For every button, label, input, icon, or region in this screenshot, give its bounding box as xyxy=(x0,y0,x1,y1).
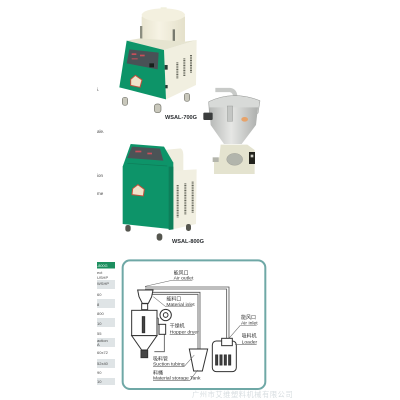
machine: WSAL-800G loader xyxy=(123,144,197,241)
table alternating rows xyxy=(97,280,115,385)
table text: 60 xyxy=(97,292,102,297)
table header xyxy=(97,262,115,268)
hopper cylinder xyxy=(140,7,185,46)
black switch box xyxy=(249,152,255,164)
casters xyxy=(122,93,190,113)
system diagram panel xyxy=(123,260,265,389)
vent slots xyxy=(177,55,191,78)
green front xyxy=(123,144,173,229)
table text: A xyxy=(97,342,100,347)
diagram: labels: 吸料管 xyxy=(153,355,168,362)
diagram: labels: Suction tubing xyxy=(153,362,185,368)
table text: 90 xyxy=(97,370,102,375)
body xyxy=(209,107,258,144)
table text: 8 xyxy=(97,302,100,307)
label: WSAL-800G: WSAL-800G xyxy=(172,239,204,245)
base block xyxy=(214,145,255,174)
steel bowl lid xyxy=(209,96,260,113)
casters xyxy=(125,224,191,241)
curved suction pipe xyxy=(215,90,235,98)
rounded frame xyxy=(123,260,265,389)
table text: USHP xyxy=(97,275,108,280)
table text: 55 xyxy=(97,331,102,336)
table text xyxy=(97,264,109,384)
diagram: labels: 能风口 xyxy=(174,269,189,276)
left edge text fragments: me xyxy=(97,191,104,196)
side controls xyxy=(165,65,168,70)
white side cabinet xyxy=(164,40,197,99)
diagram: loader xyxy=(212,338,236,372)
diagram: labels: 能风口 xyxy=(241,314,256,321)
control panel xyxy=(127,49,159,69)
left edge text fragments: i. xyxy=(97,87,99,92)
table text: 60x72 xyxy=(97,350,109,355)
diagram: labels: 吸料机 xyxy=(242,333,257,340)
control panel xyxy=(127,147,163,161)
diagram: dryer blower xyxy=(159,309,171,334)
logo xyxy=(131,75,142,87)
label: WSAL-700G: WSAL-700G xyxy=(165,115,197,121)
green front panel xyxy=(119,41,166,99)
table text: 10 xyxy=(97,379,102,384)
diagram: labels: Hopper dryer xyxy=(170,330,199,336)
table text: WSHP xyxy=(97,281,109,286)
orange label xyxy=(241,117,248,122)
diagram: labels: Loader xyxy=(242,339,258,345)
diagram: labels: Air inlet xyxy=(241,321,258,327)
diagram: labels: 料桶 xyxy=(153,369,163,376)
vent slots xyxy=(178,182,193,217)
machine: hopper receiver xyxy=(203,90,260,174)
side inlet port xyxy=(203,113,213,120)
diagram: labels: 能料口 xyxy=(166,295,181,302)
diagram: labels xyxy=(153,269,258,382)
table text: action xyxy=(97,338,108,343)
diagram: labels: 干燥机 xyxy=(170,323,185,330)
diagram: dryer hopper xyxy=(132,290,157,358)
specification table xyxy=(97,262,115,385)
diagram: labels: Material inlet xyxy=(166,302,195,308)
machine: WSAL-700G loader xyxy=(119,7,197,113)
left edge text fragments: ion xyxy=(97,173,104,178)
diagram: ducts xyxy=(145,287,229,352)
table text: 52x40 xyxy=(97,361,109,366)
white cabinet xyxy=(173,169,197,229)
logo xyxy=(132,185,144,196)
table text: 800 xyxy=(97,311,104,316)
watermark: 广州市艾维塑料机械有限公司 xyxy=(192,390,293,399)
diagram: leader lines xyxy=(145,280,257,380)
table text: -800G xyxy=(97,264,108,268)
table text: 10 xyxy=(97,321,102,326)
left edge text fragments: ale. xyxy=(97,129,104,134)
diagram: storage tank xyxy=(189,349,208,371)
left edge text fragments xyxy=(97,87,104,196)
table text: ect xyxy=(97,270,103,275)
hopper behind xyxy=(164,148,183,173)
diagram: labels: Air outlet xyxy=(174,276,194,282)
diagram: labels: Material storage Tank xyxy=(153,376,201,382)
